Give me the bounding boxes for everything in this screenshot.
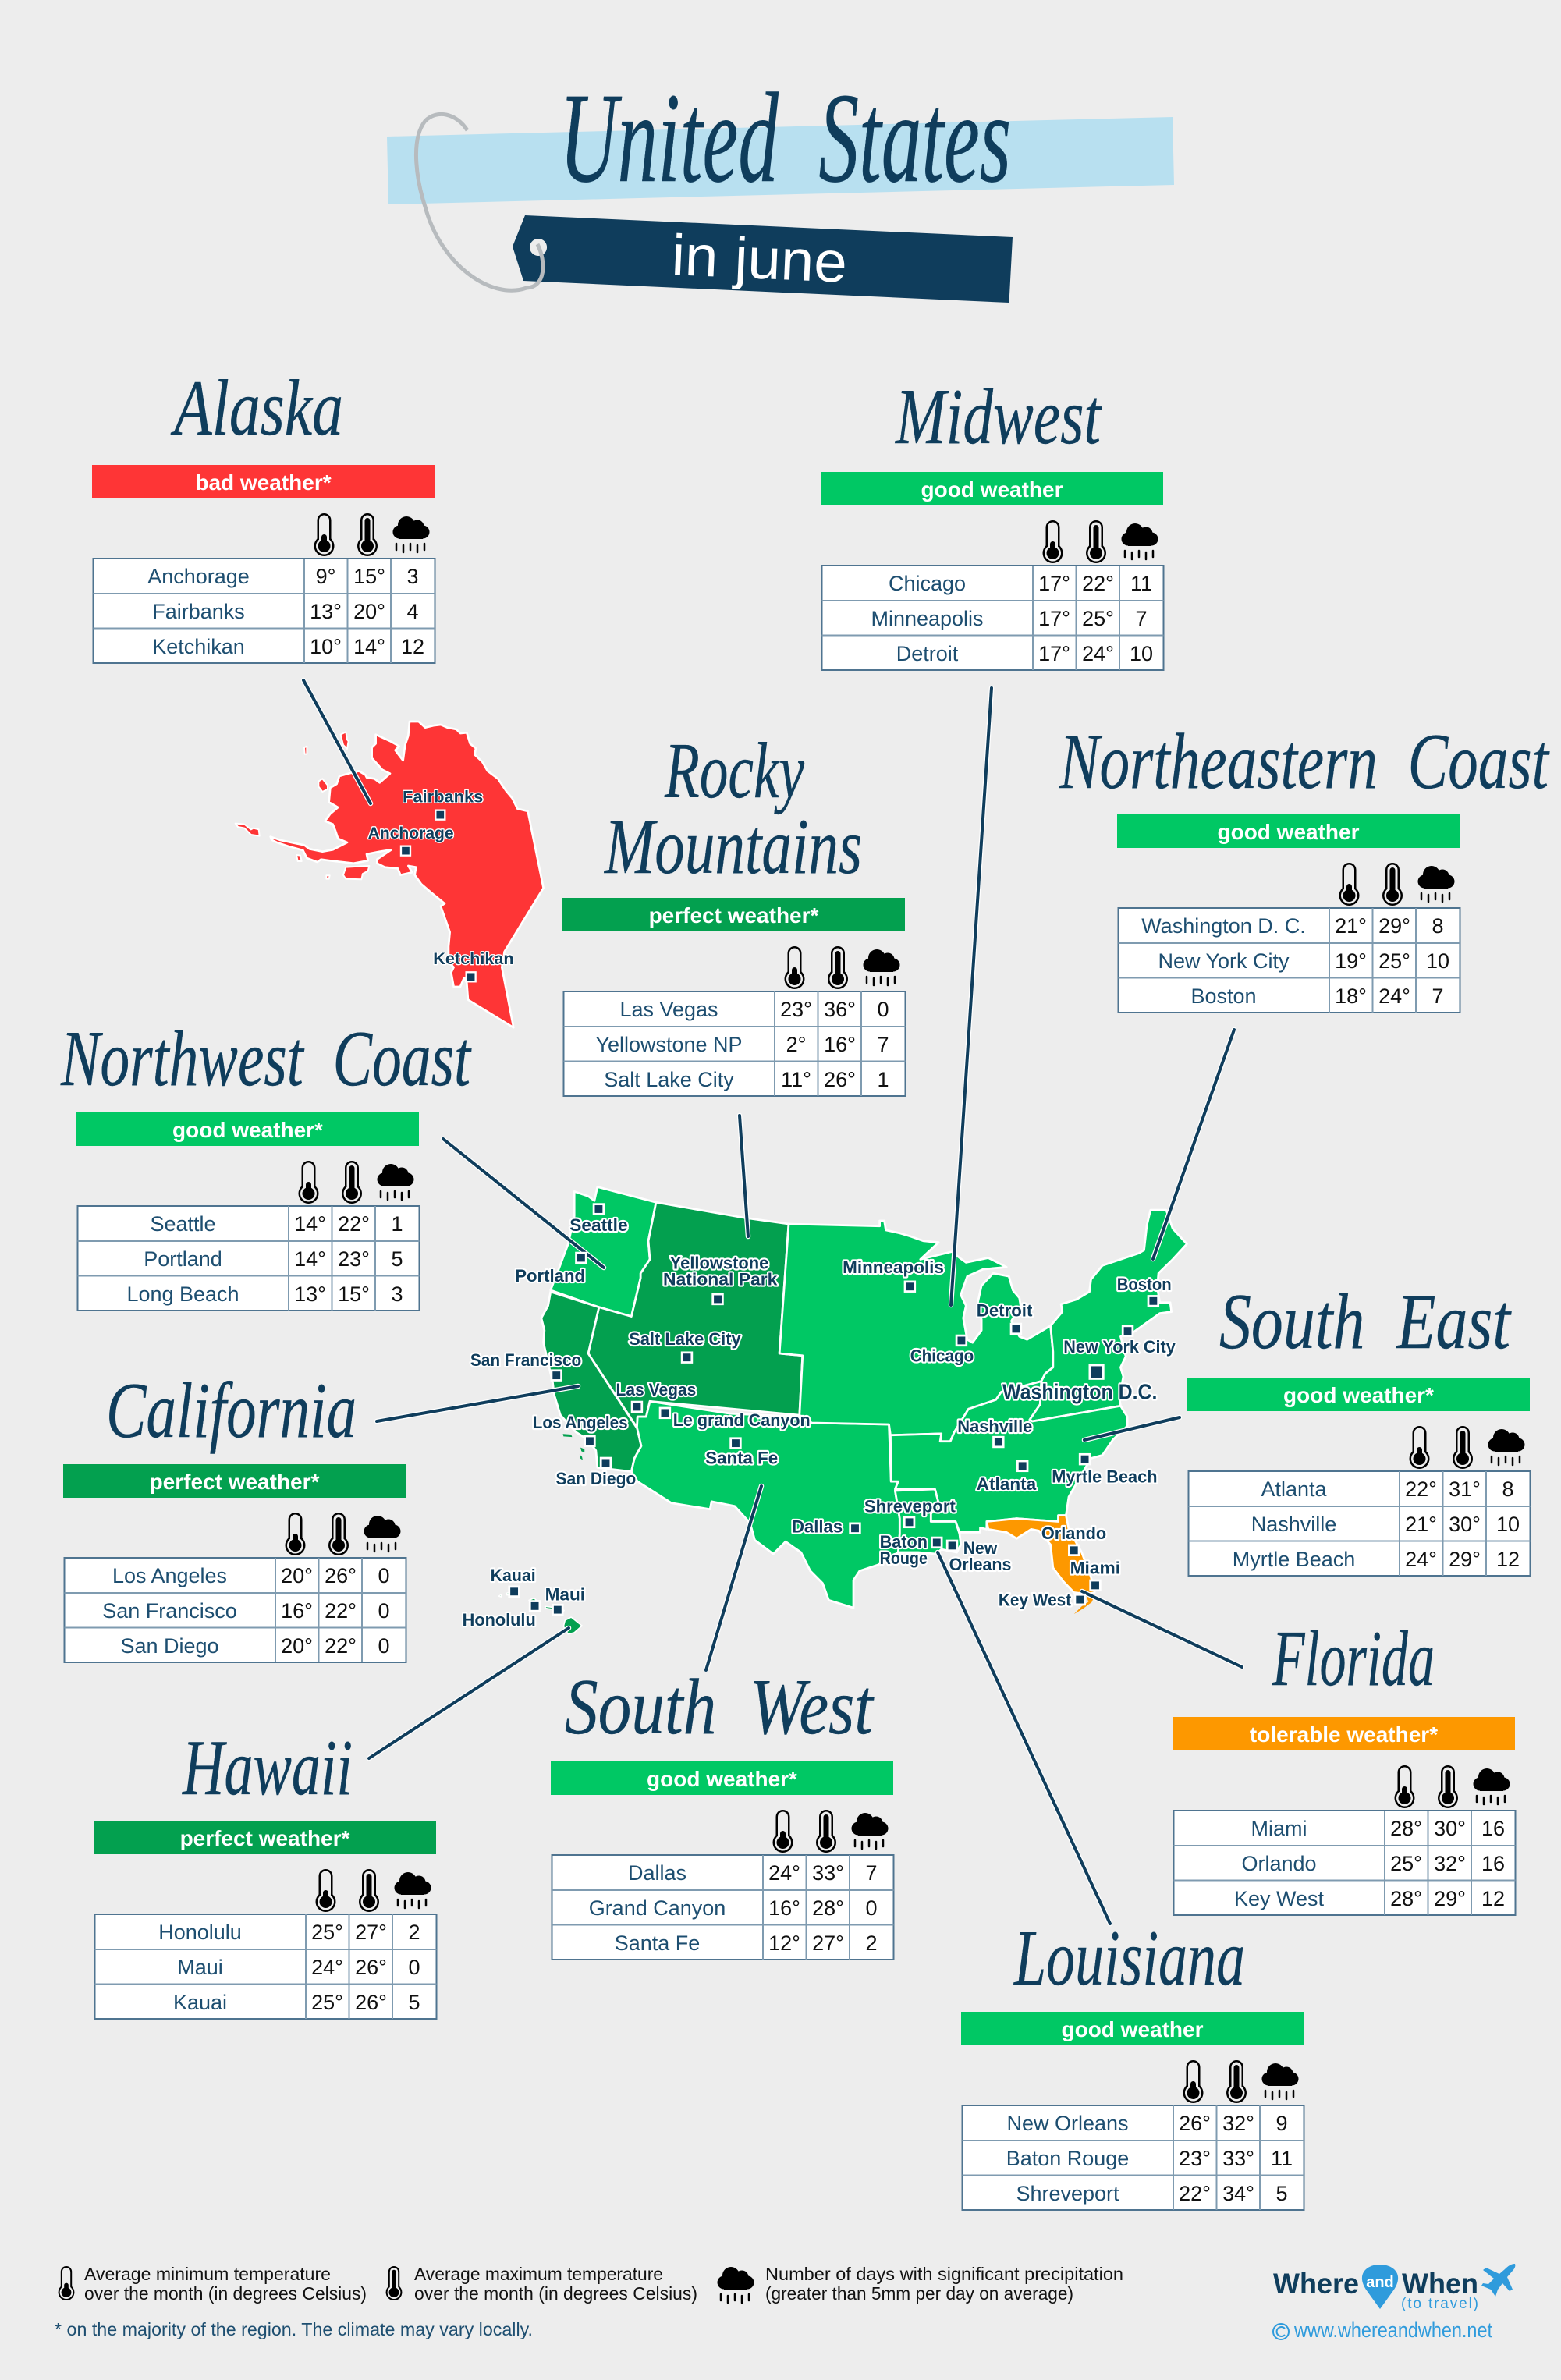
city: Los Angeles: Los Angeles: [533, 1413, 628, 1432]
heading: Alaska: [170, 364, 343, 452]
weather table: 13°: [310, 600, 342, 623]
weather table: Nashville: [1251, 1513, 1336, 1536]
city: New York City: New York City: [1063, 1337, 1176, 1357]
weather table: [562, 898, 905, 1096]
weather table: [76, 1112, 420, 1311]
weather table: perfect weather*: [649, 903, 819, 928]
weather table: 0: [378, 1634, 390, 1658]
city: Honolulu: Honolulu: [463, 1610, 536, 1630]
heading: California: [106, 1367, 357, 1455]
arrow: Midwest: [951, 688, 992, 1305]
arrow: Florida: [1082, 1591, 1242, 1667]
weather table: 2°: [786, 1033, 806, 1056]
weather table: 23°: [1179, 2147, 1211, 2170]
weather table: 23°: [338, 1247, 370, 1271]
weather table: Miami: [1251, 1817, 1307, 1840]
weather table: 16: [1481, 1852, 1505, 1875]
weather table: Kauai: [173, 1991, 227, 2014]
brand name: Where: [1273, 2268, 1359, 2300]
weather table: 14°: [294, 1247, 326, 1271]
weather table: 11: [1271, 2147, 1293, 2170]
heading: [603, 727, 862, 891]
weather table: 17°: [1038, 607, 1070, 630]
weather table: 16: [1481, 1817, 1505, 1840]
weather table: San Francisco: [102, 1599, 237, 1623]
panel: South West: [551, 1663, 894, 1960]
city: Baton Rouge: Baton: [880, 1532, 928, 1552]
weather table: 24°: [311, 1956, 343, 1979]
city marker: Anchorage: Anchorage: [368, 825, 454, 842]
weather table: 33°: [1222, 2147, 1254, 2170]
weather table: bad weather*: [195, 470, 332, 495]
weather table: 22°: [1405, 1477, 1437, 1501]
markers: [509, 1204, 1158, 1615]
weather table: 22°: [1179, 2182, 1211, 2205]
weather table: 36°: [824, 998, 856, 1021]
map: contiguous United States and Hawaii: [498, 1187, 1187, 1634]
weather table: Detroit: [896, 642, 959, 665]
weather table: 7: [1432, 984, 1444, 1008]
weather table: 34°: [1222, 2182, 1254, 2205]
region: Midwest: [779, 1221, 1053, 1442]
weather table: 12: [1496, 1548, 1520, 1571]
weather table: Yellowstone NP: [595, 1033, 743, 1056]
panel: Northwest Coast: [60, 1015, 472, 1311]
weather table: Myrtle Beach: [1233, 1548, 1355, 1571]
weather table: perfect weather*: [180, 1826, 350, 1850]
weather table: Fairbanks: [152, 600, 245, 623]
weather table: [1173, 1717, 1515, 1915]
weather table: 5: [1275, 2182, 1288, 2205]
weather table: 15°: [353, 565, 385, 588]
weather table: 32°: [1222, 2112, 1254, 2135]
weather table: 8: [1502, 1477, 1514, 1501]
city: Miami: Miami: [1070, 1559, 1120, 1578]
weather table: New Orleans: [1006, 2112, 1129, 2135]
weather table: 17°: [1038, 572, 1070, 595]
weather table: 9: [1275, 2112, 1288, 2135]
weather table: 26°: [355, 1991, 387, 2014]
weather table: Salt Lake City: [604, 1068, 734, 1091]
legend text: maximum temperature: over the month (in degrees Celsius): [414, 2283, 697, 2304]
region: South East: [890, 1382, 1127, 1532]
weather table: good weather: [921, 477, 1063, 502]
weather table: Shreveport: [1016, 2182, 1119, 2205]
weather table: Grand Canyon: [589, 1896, 726, 1920]
legend text: maximum temperature: [414, 2264, 697, 2304]
weather table: Orlando: [1241, 1852, 1317, 1875]
legend text: minimum temperature: over the month (in degrees Celsius): [84, 2283, 367, 2304]
weather table: 2: [408, 1921, 420, 1944]
weather table: good weather*: [1283, 1383, 1434, 1407]
weather table: Maui: [177, 1956, 223, 1979]
heading: Mountains: [603, 803, 862, 891]
map: Alaska: [236, 722, 544, 1027]
weather table: 8: [1432, 914, 1444, 938]
city: Yellowstone National Park: National Park: [663, 1270, 778, 1289]
weather table: 20°: [353, 600, 385, 623]
city: New Orleans: [949, 1538, 1011, 1574]
weather table: San Diego: [120, 1634, 219, 1658]
icon: map pin: [1362, 2265, 1398, 2309]
city marker: Anchorage: [368, 825, 454, 856]
tagline: (to travel): [1401, 2296, 1478, 2312]
weather table: Santa Fe: [615, 1931, 700, 1955]
weather table: 12: [1481, 1887, 1505, 1910]
california islands: [563, 1434, 584, 1460]
city: San Francisco: San Francisco: [470, 1350, 581, 1370]
weather table: 7: [1135, 607, 1148, 630]
luggage tag ring: [416, 114, 543, 290]
weather table: [94, 1821, 437, 2019]
weather table: 24°: [1405, 1548, 1437, 1571]
arrow: Louisiana: [938, 1552, 1110, 1924]
callout lines: [303, 680, 1242, 1924]
weather table: 10: [1426, 949, 1449, 973]
weather table: 25°: [1082, 607, 1114, 630]
icon: airplane: [1481, 2264, 1515, 2297]
arrow: California: [377, 1386, 578, 1421]
arrow: South East: [1084, 1417, 1180, 1440]
city: Santa Fe: Santa Fe: [705, 1449, 778, 1468]
city: Baton Rouge: [880, 1532, 928, 1568]
weather table: tolerable weather*: [1250, 1722, 1438, 1747]
panel: Hawaii: [94, 1724, 437, 2019]
city: Yellowstone National Park: Yellowstone: [670, 1253, 768, 1272]
weather table: 18°: [1335, 984, 1367, 1008]
heading: Northwest Coast: [60, 1015, 472, 1103]
arrow: Northwest Coast: [443, 1139, 604, 1268]
subtitle: in june: [670, 222, 849, 295]
weather table: Minneapolis: [871, 607, 984, 630]
weather table: good weather: [1217, 820, 1360, 844]
icon: maximum temperature: [386, 2266, 402, 2300]
city: Kauai: Kauai: [491, 1566, 536, 1585]
city marker: Fairbanks: [403, 788, 483, 820]
weather table: Dallas: [628, 1861, 686, 1885]
weather table: 28°: [1390, 1887, 1422, 1910]
heading: Midwest: [894, 373, 1102, 461]
weather table: Seattle: [150, 1212, 216, 1236]
brand name second word: When: [1402, 2268, 1478, 2300]
region: Northwest Coast: [551, 1187, 656, 1317]
panel: Louisiana: [961, 1914, 1304, 2210]
weather table: [92, 465, 435, 663]
weather table: 25°: [1378, 949, 1410, 973]
city: Seattle: Seattle: [569, 1215, 628, 1235]
weather table: [1117, 814, 1460, 1013]
city: New Orleans: New: [963, 1538, 998, 1558]
arrow: Northeastern Coast: [1153, 1030, 1234, 1259]
legend: [59, 2264, 1123, 2304]
weather table: Las Vegas: [619, 998, 718, 1021]
weather table: 10: [1496, 1513, 1520, 1536]
city: Maui: Maui: [545, 1584, 585, 1604]
arrow: Hawaii: [369, 1628, 569, 1758]
footnote: * on the majority of the region. The climate may vary locally.: [55, 2319, 533, 2339]
weather table: 21°: [1335, 914, 1367, 938]
logo: Where and When: [1273, 2264, 1515, 2342]
weather table: 10°: [310, 635, 342, 658]
weather table: 12: [401, 635, 424, 658]
weather table: Los Angeles: [112, 1564, 227, 1587]
legend text: precipitation: Number of days with significant precipitation: [765, 2264, 1123, 2284]
heading: Florida: [1272, 1615, 1435, 1703]
weather table: 3: [406, 565, 419, 588]
title block: [387, 66, 1174, 303]
arrow: Rocky Mountains: [740, 1116, 748, 1236]
city: New Orleans: Orleans: [949, 1555, 1011, 1574]
weather table: 23°: [780, 998, 812, 1021]
weather table: 22°: [325, 1599, 357, 1623]
weather table: 0: [378, 1564, 390, 1587]
city: Shreveport: Shreveport: [864, 1497, 956, 1516]
weather table: 28°: [1390, 1817, 1422, 1840]
weather table: 16°: [824, 1033, 856, 1056]
weather table: 25°: [1390, 1852, 1422, 1875]
panel: Northeastern Coast: [1059, 718, 1550, 1013]
icon: precipitation: [718, 2267, 754, 2303]
weather table: 1: [877, 1068, 889, 1091]
weather table: 33°: [812, 1861, 844, 1885]
weather table: Chicago: [889, 572, 966, 595]
weather table: 25°: [311, 1921, 343, 1944]
weather table: Washington D. C.: [1141, 914, 1306, 938]
region: South West: [631, 1401, 899, 1608]
weather table: 26°: [355, 1956, 387, 1979]
weather table: 15°: [338, 1282, 370, 1306]
main title: United States: [559, 66, 1011, 209]
florida keys: [1074, 1594, 1095, 1614]
weather table: 24°: [768, 1861, 800, 1885]
weather table: 26°: [824, 1068, 856, 1091]
region: Florida: [987, 1516, 1094, 1594]
panel: Florida: [1173, 1615, 1515, 1915]
weather table: 24°: [1082, 642, 1114, 665]
weather table: 3: [391, 1282, 403, 1306]
weather table: Atlanta: [1261, 1477, 1328, 1501]
weather table: 22°: [1082, 572, 1114, 595]
panel: Midwest: [821, 373, 1164, 670]
legend text: maximum temperature: Average maximum temperature: [414, 2264, 663, 2284]
weather table: 0: [877, 998, 889, 1021]
weather table: 5: [391, 1247, 403, 1271]
weather table: [551, 1761, 894, 1960]
panel: South East: [1187, 1278, 1531, 1576]
icon: minimum temperature: [59, 2266, 74, 2300]
title band: [387, 117, 1174, 204]
weather table: good weather: [1061, 2017, 1204, 2041]
weather table: good weather*: [647, 1767, 797, 1791]
weather table: perfect weather*: [150, 1470, 320, 1494]
weather table: Long Beach: [126, 1282, 239, 1306]
weather table: 20°: [281, 1634, 313, 1658]
city: San Diego: San Diego: [555, 1469, 636, 1488]
panel: Alaska: [92, 364, 435, 663]
weather table: Ketchikan: [152, 635, 245, 658]
city: Dallas: Dallas: [792, 1516, 843, 1536]
weather table: good weather*: [172, 1118, 323, 1142]
weather table: 11: [1130, 572, 1152, 595]
region: Northeastern Coast: [1030, 1210, 1187, 1421]
weather table: 29°: [1378, 914, 1410, 938]
weather table: 7: [877, 1033, 889, 1056]
weather table: 22°: [325, 1634, 357, 1658]
weather table: New York City: [1158, 949, 1290, 973]
weather table: 30°: [1434, 1817, 1466, 1840]
region: Rocky Mountains: [588, 1202, 803, 1428]
weather table: 17°: [1038, 642, 1070, 665]
luggage tag: [513, 215, 1013, 303]
weather table: 29°: [1449, 1548, 1481, 1571]
weather table: Portland: [144, 1247, 222, 1271]
heading: Hawaii: [182, 1724, 353, 1812]
weather table: 0: [378, 1599, 390, 1623]
weather table: 20°: [281, 1564, 313, 1587]
weather table: 28°: [812, 1896, 844, 1920]
legend text: precipitation: [765, 2264, 1123, 2304]
weather table: 16°: [768, 1896, 800, 1920]
weather table: 22°: [338, 1212, 370, 1236]
city marker: Ketchikan: [433, 950, 514, 981]
weather table: Key West: [1234, 1887, 1325, 1910]
weather table: 4: [406, 600, 419, 623]
map city labels and markers: [463, 1204, 1176, 1630]
weather table: 16°: [281, 1599, 313, 1623]
weather table: 25°: [311, 1991, 343, 2014]
weather table: 27°: [812, 1931, 844, 1955]
legend text: precipitation: (greater than 5mm per day on average): [765, 2283, 1073, 2304]
weather table: Boston: [1190, 984, 1257, 1008]
city: Orlando: Orlando: [1041, 1523, 1106, 1543]
weather table: 10: [1130, 642, 1153, 665]
weather table: [821, 472, 1164, 670]
arrow: Alaska: [303, 680, 371, 803]
city: Las Vegas: Las Vegas: [616, 1380, 696, 1399]
legend text: minimum temperature: [84, 2264, 367, 2304]
weather table: [1187, 1378, 1531, 1576]
panel: California: [63, 1367, 406, 1662]
weather table: 0: [865, 1896, 878, 1920]
weather table: 9°: [316, 565, 335, 588]
city: Minneapolis: Minneapolis: [843, 1257, 944, 1277]
weather table: 12°: [768, 1931, 800, 1955]
weather table: 2: [865, 1931, 878, 1955]
city: Portland: Portland: [515, 1266, 585, 1286]
weather table: Honolulu: [158, 1921, 242, 1944]
city: Atlanta: Atlanta: [977, 1474, 1037, 1494]
weather table: 26°: [325, 1564, 357, 1587]
weather table: 19°: [1335, 949, 1367, 973]
city: Yellowstone National Park: [663, 1253, 778, 1289]
weather table: 29°: [1434, 1887, 1466, 1910]
city: Chicago: Chicago: [910, 1346, 974, 1366]
city: Key West: Key West: [999, 1590, 1072, 1609]
weather table: Baton Rouge: [1006, 2147, 1129, 2170]
city: Nashville: Nashville: [957, 1417, 1032, 1436]
weather table: 26°: [1179, 2112, 1211, 2135]
legend text: minimum temperature: Average minimum temperature: [84, 2264, 331, 2284]
weather table: 1: [391, 1212, 403, 1236]
region: Louisiana: [895, 1489, 961, 1554]
website: www.whereandwhen.net: [1293, 2318, 1492, 2342]
city: Detroit: Detroit: [977, 1301, 1033, 1321]
city: Baton Rouge: Rouge: [880, 1548, 928, 1568]
city: Le grand Canyon: Le grand Canyon: [673, 1410, 811, 1430]
weather table: [961, 2012, 1304, 2210]
weather table: 27°: [355, 1921, 387, 1944]
weather table: 7: [865, 1861, 878, 1885]
city marker: Fairbanks: Fairbanks: [403, 788, 483, 806]
arrow: South West: [706, 1486, 761, 1670]
weather table: 11°: [781, 1068, 811, 1091]
weather table: 14°: [353, 635, 385, 658]
weather table: 24°: [1378, 984, 1410, 1008]
pin word: and: [1366, 2274, 1394, 2291]
city marker: Ketchikan: Ketchikan: [433, 950, 514, 968]
weather table: [63, 1464, 406, 1662]
weather table: 13°: [294, 1282, 326, 1306]
weather table: 14°: [294, 1212, 326, 1236]
weather table: 5: [408, 1991, 420, 2014]
city: Boston: Boston: [1117, 1275, 1172, 1294]
city: Salt Lake City: Salt Lake City: [629, 1329, 741, 1349]
heading: Rocky: [664, 727, 805, 815]
weather table: 31°: [1449, 1477, 1481, 1501]
city: Washington D.C.: Washington D.C.: [1002, 1380, 1157, 1404]
weather table: 32°: [1434, 1852, 1466, 1875]
heading: South West: [565, 1663, 875, 1751]
weather table: Anchorage: [147, 565, 250, 588]
city: Myrtle Beach: Myrtle Beach: [1052, 1467, 1157, 1486]
region: Hawaii islands: [498, 1592, 582, 1634]
weather table: 21°: [1405, 1513, 1437, 1536]
weather table: 30°: [1449, 1513, 1481, 1536]
region: California: [541, 1292, 641, 1471]
weather table: 0: [408, 1956, 420, 1979]
panel: Rocky Mountains: [562, 727, 905, 1096]
heading: Louisiana: [1013, 1914, 1245, 2002]
